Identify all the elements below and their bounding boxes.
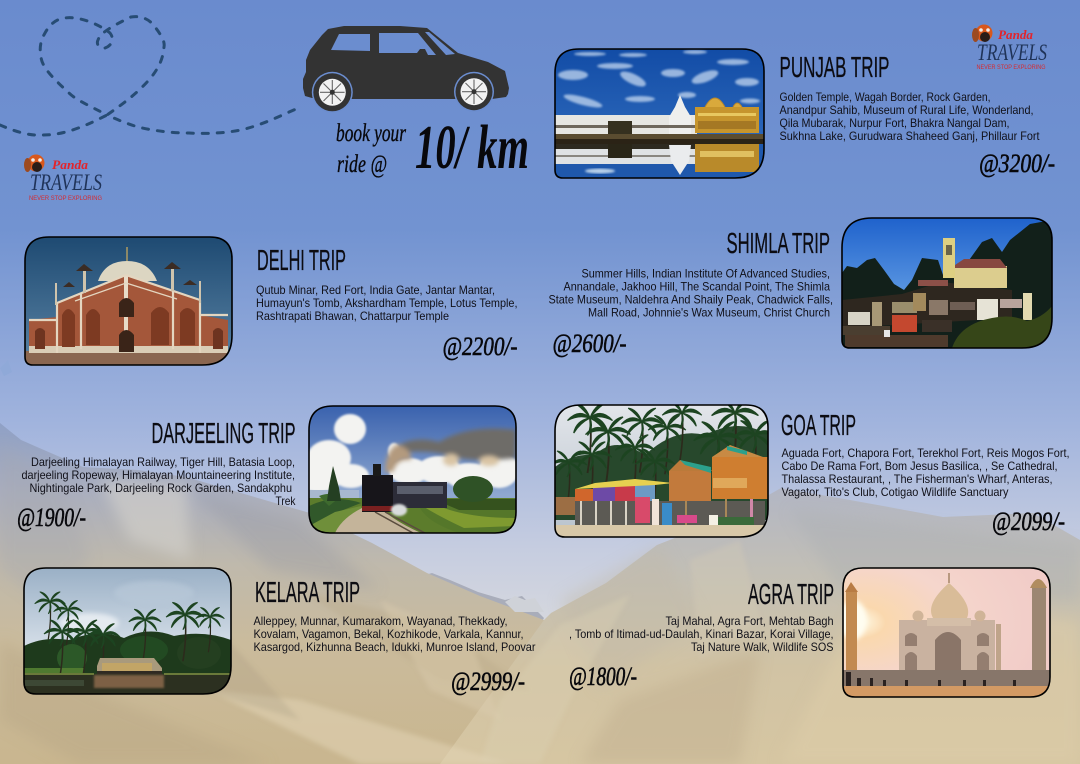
places list: State Museum, Naldehra And Shaily Peak, Chadwick Falls, bbox=[548, 294, 833, 306]
heading: GOA TRIP bbox=[781, 410, 856, 442]
heading: DELHI TRIP bbox=[257, 245, 346, 277]
places list: Taj Mahal, Agra Fort, Mehtab Bagh bbox=[666, 615, 834, 628]
places list bbox=[569, 615, 834, 654]
price: @1800/- bbox=[569, 662, 637, 691]
heading: AGRA TRIP bbox=[748, 579, 834, 611]
price: @2999/- bbox=[451, 667, 525, 696]
places list: Kasargod, Kizhunna Beach, Idukki, Munroe Island, Poovar bbox=[254, 641, 536, 654]
text: booking offer: ride @ bbox=[337, 151, 387, 178]
decorative dashed heart route bbox=[0, 17, 296, 135]
photo: Humayun's Tomb bbox=[25, 237, 232, 365]
panel: Goa trip bbox=[551, 397, 1070, 537]
panel: Kerala trip bbox=[24, 568, 536, 696]
logo: Panda Travels right: Panda bbox=[998, 27, 1034, 42]
places list bbox=[782, 447, 1070, 499]
text: booking offer bbox=[336, 114, 529, 182]
places list: Nightingale Park, Darjeeling Rock Garden, Sandakphu bbox=[30, 482, 292, 495]
places list bbox=[256, 284, 518, 323]
places list: Alleppey, Munnar, Kumarakom, Wayanad, Thekkady, bbox=[254, 615, 508, 628]
places list: Mall Road, Johnnie's Wax Museum, Christ Church bbox=[588, 306, 830, 320]
places list: Vagator, Tito's Club, Cotigao Wildlife Sanctuary bbox=[782, 486, 1009, 499]
photo: Taj Mahal bbox=[839, 568, 1050, 697]
photo: toy train bbox=[295, 406, 519, 533]
photo: beach huts bbox=[551, 397, 777, 537]
places list: Golden Temple, Wagah Border, Rock Garden, bbox=[780, 91, 990, 104]
panel: Delhi trip bbox=[25, 237, 518, 365]
panel: Punjab trip bbox=[555, 49, 1055, 178]
places list: Sukhna Lake, Gurudwara Shaheed Ganj, Phillaur Fort bbox=[780, 130, 1040, 143]
price: @3200/- bbox=[979, 149, 1055, 178]
places list: Thalassa Restaurant, , The Fisherman's Wharf, Anteras, bbox=[782, 473, 1052, 486]
background: mountains bbox=[0, 360, 1080, 764]
places list bbox=[548, 268, 833, 320]
panel: Shimla trip bbox=[548, 218, 1052, 358]
heading: KELARA TRIP bbox=[255, 577, 360, 609]
price: @1900/- bbox=[17, 503, 86, 532]
logo: Panda Travels right: NEVER STOP EXPLORING bbox=[976, 64, 1046, 71]
panel: Darjeeling trip bbox=[17, 406, 519, 533]
icon: car silhouette bbox=[303, 26, 509, 113]
places list bbox=[22, 456, 296, 508]
places list: Taj Nature Walk, Wildlife SOS bbox=[691, 641, 834, 654]
heading: SHIMLA TRIP bbox=[726, 228, 830, 260]
places list: Humayun's Tomb, Akshardham Temple, Lotus Temple, bbox=[256, 297, 518, 310]
text: booking offer: 10/ km bbox=[415, 114, 529, 182]
places list: Darjeeling Himalayan Railway, Tiger Hill, Batasia Loop, bbox=[31, 456, 295, 469]
places list: Cabo De Rama Fort, Bom Jesus Basilica, , Se Cathedral, bbox=[782, 460, 1058, 473]
photo: backwater houseboat bbox=[24, 568, 231, 694]
heading: DARJEELING TRIP bbox=[152, 418, 296, 450]
places list bbox=[780, 91, 1040, 143]
places list: darjeeling Ropeway, Himalayan Mountaineering Institute, bbox=[22, 469, 295, 482]
photo: Golden Temple bbox=[555, 49, 764, 178]
places list: Trek bbox=[276, 495, 296, 508]
price: @2200/- bbox=[442, 332, 518, 361]
places list: Summer Hills, Indian Institute Of Advanced Studies, bbox=[582, 268, 830, 280]
places list: Anandpur Sahib, Museum of Rural Life, Wonderland, bbox=[780, 104, 1034, 117]
places list: Kovalam, Vagamon, Bekal, Kozhikode, Varkala, Kannur, bbox=[254, 628, 524, 641]
places list: Qutub Minar, Red Fort, India Gate, Jantar Mantar, bbox=[256, 284, 495, 297]
price: @2600/- bbox=[552, 329, 626, 358]
logo: Panda Travels left bbox=[24, 154, 102, 202]
heading: PUNJAB TRIP bbox=[780, 52, 890, 84]
logo: Panda Travels right bbox=[972, 24, 1047, 71]
text: booking offer: book your bbox=[336, 120, 406, 147]
logo: Panda Travels left: NEVER STOP EXPLORING bbox=[29, 195, 102, 202]
logo: Panda Travels right: TRAVELS bbox=[977, 40, 1047, 65]
places list: Rashtrapati Bhawan, Chattarpur Temple bbox=[256, 310, 449, 323]
panel: Agra trip bbox=[569, 568, 1050, 697]
places list bbox=[254, 615, 536, 654]
photo: Christ Church hillside bbox=[842, 218, 1052, 348]
places list: Qila Mubarak, Nurpur Fort, Bhakra Nangal Dam, bbox=[780, 117, 1010, 130]
logo: Panda Travels left: Panda bbox=[52, 157, 89, 172]
logo: Panda Travels left: TRAVELS bbox=[30, 170, 102, 195]
places list: , Tomb of Itimad-ud-Daulah, Kinari Bazar, Korai Village, bbox=[569, 628, 834, 641]
places list: Annandale, Jakhoo Hill, The Scandal Point, The Shimla bbox=[564, 280, 830, 294]
